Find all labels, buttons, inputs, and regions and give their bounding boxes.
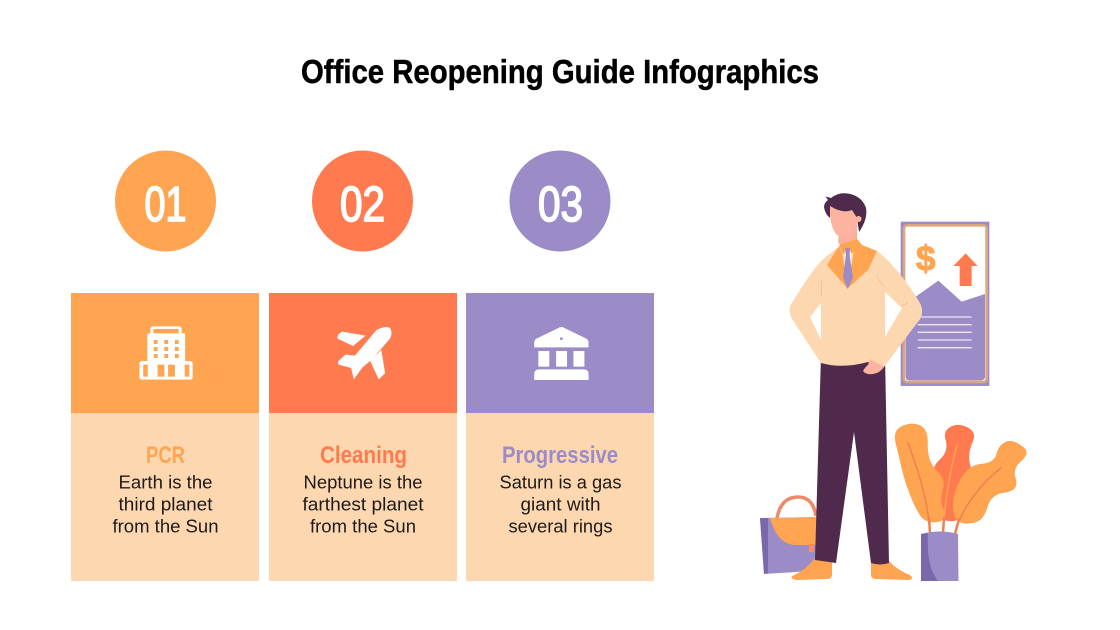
hand	[863, 359, 884, 374]
tie	[843, 248, 853, 289]
panel: column 01 PCR	[71, 150, 259, 581]
number badge 03: 03	[538, 178, 583, 232]
text block Progressive: Saturn is a gas	[500, 472, 622, 492]
sweater	[790, 246, 922, 367]
header block with bank icon	[466, 293, 654, 413]
text block PCR: Earth is the	[118, 472, 212, 492]
text block PCR: PCR	[146, 442, 185, 469]
text block PCR: third planet	[118, 494, 212, 514]
shirt	[840, 247, 860, 286]
neck	[838, 224, 857, 250]
text block Cleaning: from the Sun	[310, 516, 416, 536]
text block PCR: from the Sun	[112, 516, 218, 536]
text block Progressive	[466, 413, 654, 581]
number badge 01	[115, 150, 216, 252]
number badge 01: 01	[144, 178, 186, 232]
number badge 03	[510, 150, 610, 252]
up arrow	[953, 253, 978, 286]
text block Cleaning	[269, 413, 457, 581]
title: Office Reopening Guide Infographics	[301, 54, 819, 91]
panel: column 02 Cleaning	[269, 150, 457, 581]
text block PCR	[71, 413, 259, 581]
shoes	[792, 558, 912, 580]
leaf: right	[954, 442, 1025, 522]
text block Progressive: giant with	[520, 494, 600, 514]
shopping bag	[760, 497, 818, 574]
face	[830, 204, 858, 237]
ear	[856, 216, 862, 222]
chart board	[901, 222, 989, 386]
text block Progressive: Progressive	[502, 442, 618, 469]
illustration: businessman with chart, bag and plant	[760, 193, 1025, 581]
arm gaps	[810, 303, 821, 340]
text block Cleaning: Neptune is the	[304, 472, 422, 492]
number badge 02: 02	[340, 178, 385, 232]
hair	[824, 193, 866, 232]
potted plant	[896, 425, 1025, 581]
leaf: left	[896, 425, 944, 521]
text block Cleaning: Cleaning	[320, 442, 407, 469]
header block with building icon	[71, 293, 259, 413]
businessman upper body	[790, 193, 922, 374]
number badge 02	[312, 150, 413, 252]
text block Cleaning: farthest planet	[302, 494, 424, 514]
text block Progressive: several rings	[508, 516, 612, 536]
leaf: middle	[934, 426, 973, 520]
collar and lapels	[827, 239, 877, 288]
header block with plane icon	[269, 293, 457, 413]
dollar sign: $	[916, 240, 936, 279]
trousers	[815, 355, 889, 564]
panel: column 03 Progressive	[466, 150, 654, 581]
